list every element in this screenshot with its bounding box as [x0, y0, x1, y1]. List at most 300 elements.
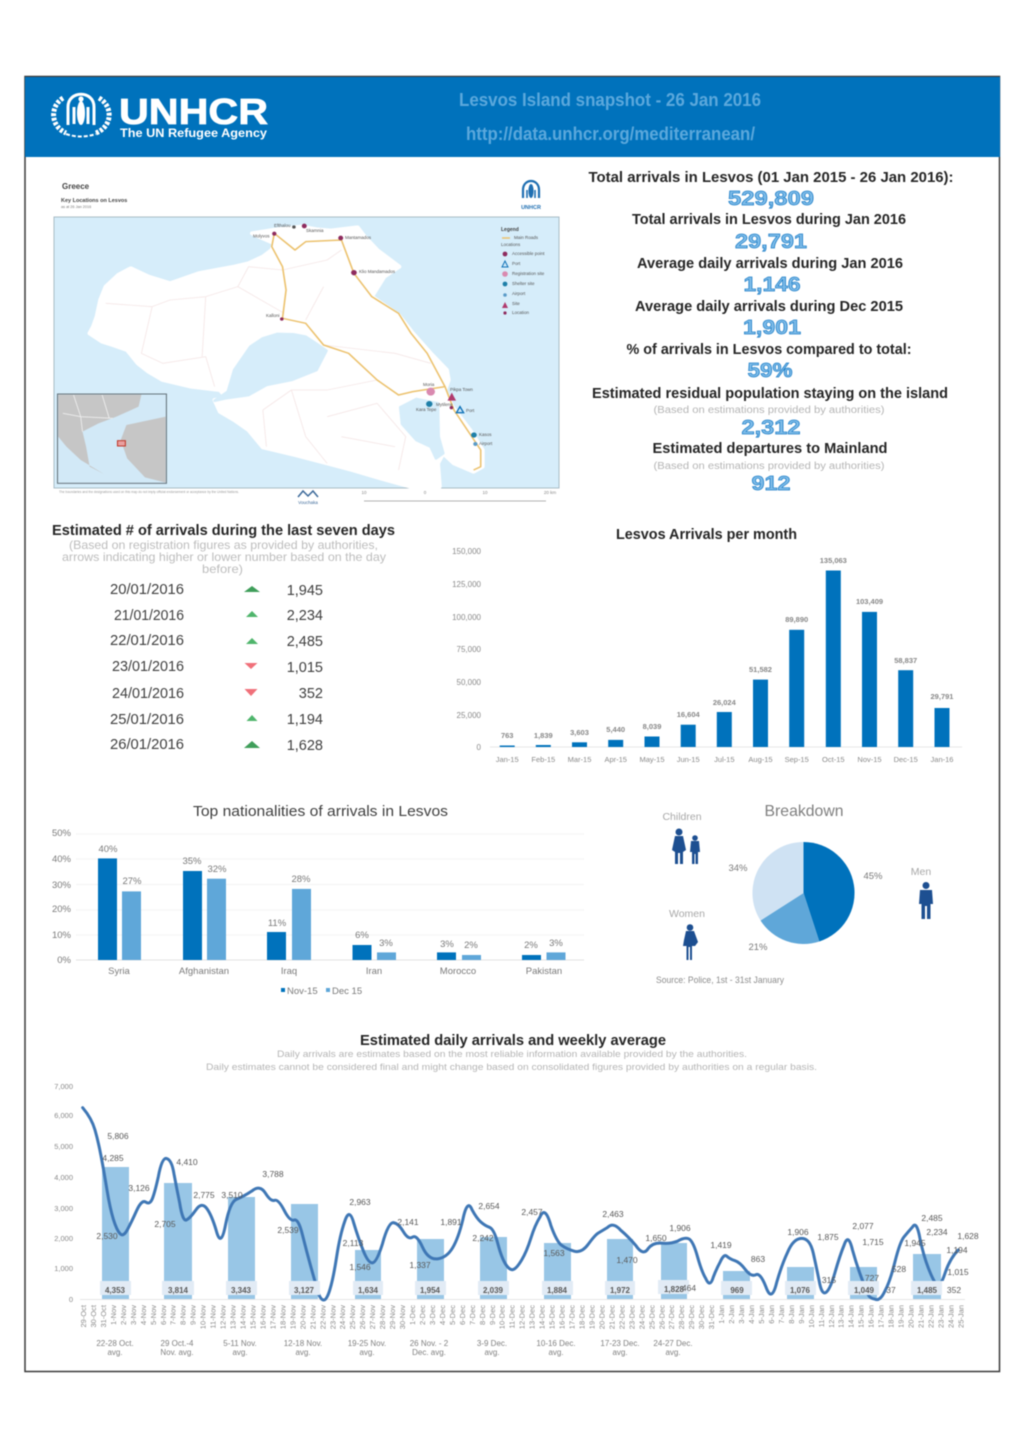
bar value labels: 27%	[122, 876, 142, 887]
date axis labels: 20-Nov	[298, 1305, 307, 1329]
panel: top nationalities	[52, 803, 584, 997]
logo wordmark: UNHCR	[119, 91, 268, 132]
weekly period labels	[96, 1339, 693, 1357]
map frame and sea	[54, 217, 559, 488]
island landmass	[57, 224, 482, 487]
daily value labels: 1,715	[862, 1237, 884, 1247]
icon: UNHCR emblem	[54, 94, 109, 136]
place labels: Port	[466, 408, 475, 413]
chart title: Estimated daily arrivals and weekly average	[360, 1033, 666, 1049]
bar value labels: 3%	[440, 939, 454, 950]
weekly average value labels: 1,972	[610, 1286, 631, 1295]
logo tagline: The UN Refugee Agency	[120, 126, 267, 140]
y axis	[452, 547, 482, 752]
weekly average value labels: 1,634	[358, 1286, 379, 1295]
date axis labels: 31-Oct	[99, 1304, 108, 1328]
y axis: 3,000	[54, 1204, 73, 1213]
weekly period labels: avg.	[359, 1348, 375, 1357]
pie labels	[728, 863, 883, 953]
pie labels: 45%	[863, 871, 883, 882]
map legend: Locations	[501, 242, 521, 247]
location markers	[272, 224, 477, 446]
date axis labels: 5-Nov	[149, 1305, 158, 1325]
chart title: Top nationalities of arrivals in Lesvos	[193, 803, 448, 820]
panel: arrivals during last seven days	[52, 523, 395, 754]
row: 20 January: 20/01/2016	[110, 582, 184, 598]
weekly average value labels: 1,076	[790, 1286, 811, 1295]
map disclaimer and scale bar: Vouchaka	[298, 500, 318, 505]
date axis labels: 10-Jan	[807, 1305, 816, 1328]
row: 20 January: 1,945	[287, 583, 323, 599]
date axis labels: 5-Jan	[757, 1305, 766, 1324]
month labels: Jan-16	[931, 755, 953, 764]
place labels: Mantamados	[345, 235, 372, 240]
daily value labels: 1,546	[349, 1262, 371, 1272]
date axis labels: 13-Jan	[837, 1305, 846, 1328]
daily value labels: 1,194	[946, 1245, 968, 1255]
daily arrivals line	[83, 1108, 958, 1300]
y axis: 5,000	[54, 1142, 73, 1151]
weekly period labels: Dec. avg.	[412, 1348, 446, 1357]
total arrivals in January: 29,791	[735, 231, 807, 253]
bar value labels: 1,839	[534, 731, 553, 740]
bar value labels: 35%	[182, 856, 202, 867]
date axis labels: 27-Nov	[368, 1305, 377, 1329]
weekly period labels: avg.	[232, 1348, 248, 1357]
row: 21 January: 2,234	[287, 608, 323, 624]
month labels: Sep-15	[785, 755, 809, 764]
panel: Lesvos arrivals per month	[452, 527, 962, 764]
date axis labels: 31-Dec	[707, 1305, 716, 1329]
bar value labels: 2%	[464, 940, 478, 951]
date axis labels: 16-Nov	[258, 1305, 268, 1329]
map disclaimer and scale bar: The boundaries and the designations used on this map do not imply official endorsement or acceptance by the United Nations.	[59, 490, 239, 494]
date axis labels: 25-Nov	[348, 1305, 357, 1329]
date axis labels: 8-Nov	[179, 1305, 188, 1325]
date axis labels: 11-Jan	[817, 1305, 826, 1327]
row: 21 January	[114, 608, 323, 624]
daily value labels: 1,945	[904, 1238, 926, 1248]
date axis labels: 26-Dec	[657, 1305, 666, 1329]
y axis labels: 0%	[57, 955, 72, 966]
bar value labels: 89,890	[785, 615, 808, 624]
map disclaimer and scale bar	[59, 490, 556, 505]
weekly period labels: 22-28 Oct.	[96, 1339, 134, 1348]
month labels: Nov-15	[857, 755, 882, 764]
panel: map of key locations on Lesvos	[54, 181, 559, 505]
total arrivals: Total arrivals in Lesvos (01 Jan 2015 - 26 Jan 2016):	[588, 170, 954, 186]
date axis labels: 23-Nov	[328, 1305, 337, 1329]
date axis labels: 15-Jan	[857, 1305, 866, 1328]
row: 23 January: 23/01/2016	[112, 659, 184, 675]
daily value labels: 1,891	[440, 1217, 462, 1227]
place labels: Kalloni	[266, 313, 280, 318]
row: 25 January	[110, 712, 323, 728]
date axis labels: 17-Dec	[568, 1305, 576, 1329]
panel: estimated daily arrivals and weekly average	[54, 1033, 979, 1357]
y axis labels: 30%	[52, 880, 72, 891]
date axis labels: 22-Jan	[926, 1305, 936, 1328]
bar value labels: 58,837	[894, 656, 917, 665]
icon: children: Children	[662, 811, 702, 823]
map legend: Legend	[501, 227, 519, 233]
date axis labels: 8-Jan	[787, 1305, 796, 1324]
average daily January	[637, 256, 903, 296]
date axis labels: 7-Nov	[169, 1305, 178, 1325]
place labels	[253, 223, 493, 446]
map legend: Main Roads	[514, 235, 539, 240]
date axis labels: 16-Jan	[867, 1305, 876, 1328]
chart note: Daily arrivals are estimates based on the most reliable information available provided by the authorities.	[277, 1049, 747, 1060]
daily value labels: 2,539	[277, 1225, 299, 1235]
row: 23 January	[112, 659, 323, 676]
map legend: Airport	[512, 291, 526, 296]
bar value labels: 28%	[291, 874, 311, 885]
place labels: Efthalou	[274, 223, 291, 228]
place labels: Moria	[423, 382, 435, 387]
bar value labels: 3%	[379, 938, 393, 949]
date axis labels: 12-Jan	[827, 1305, 836, 1328]
weekly period labels: 5-11 Nov.	[223, 1339, 257, 1348]
chart legend: Nov-15	[287, 986, 318, 997]
bar value labels: 40%	[98, 844, 118, 855]
bar value labels: 26,024	[713, 698, 737, 707]
date axis labels: 27-Dec	[667, 1305, 676, 1329]
date axis labels: 13-Dec	[528, 1305, 537, 1329]
row: 25 January: 25/01/2016	[110, 712, 184, 728]
date axis labels	[79, 1304, 965, 1329]
date axis labels: 6-Nov	[159, 1305, 168, 1325]
y axis: 50,000	[457, 678, 482, 687]
place labels: Airport	[479, 441, 493, 446]
month labels: Oct-15	[822, 755, 845, 764]
date axis labels: 19-Dec	[588, 1305, 596, 1329]
map legend: Site	[512, 301, 520, 306]
bar value labels: 8,039	[643, 722, 661, 731]
chart title: Lesvos Arrivals per month	[616, 527, 797, 543]
y axis: 100,000	[452, 613, 482, 622]
date axis labels: 19-Jan	[896, 1305, 906, 1328]
average daily January: Average daily arrivals during Jan 2016	[637, 256, 903, 272]
weekly period labels: avg.	[107, 1348, 123, 1357]
average daily December: 1,901	[743, 317, 801, 339]
row: 24 January: 24/01/2016	[112, 686, 184, 702]
weekly period labels: 26 Nov. - 2	[410, 1339, 449, 1348]
weekly average value labels: 2,039	[483, 1286, 504, 1295]
date axis labels: 12-Nov	[219, 1305, 228, 1329]
date axis labels: 24-Jan	[946, 1305, 955, 1328]
y axis: 7,000	[54, 1082, 73, 1091]
date axis labels: 2-Nov	[119, 1305, 128, 1325]
table note: arrows indicating higher or lower number based on the day	[62, 550, 386, 564]
daily value labels: 4,410	[176, 1157, 198, 1167]
departures to mainland	[652, 441, 888, 495]
daily value labels: 1,470	[616, 1255, 638, 1265]
date axis labels: 29-Nov	[388, 1305, 397, 1329]
total arrivals	[588, 170, 954, 210]
row: 26 January	[110, 737, 323, 754]
row: 24 January: 352	[299, 686, 323, 702]
row: 20 January	[110, 582, 323, 599]
daily value labels: 3,126	[128, 1183, 150, 1193]
total arrivals: 529,809	[728, 188, 814, 210]
month labels: Jan-15	[496, 755, 519, 764]
map heading: Key Locations on Lesvos	[61, 198, 127, 204]
pie labels: 21%	[748, 942, 768, 953]
row: 24 January	[112, 686, 323, 702]
date axis labels: 21-Dec	[607, 1305, 616, 1329]
daily value labels	[96, 1131, 979, 1295]
country labels: Afghanistan	[179, 966, 229, 977]
table note: (Based on registration figures as provided by authorities,	[69, 538, 378, 552]
date axis labels: 9-Jan	[797, 1305, 806, 1324]
date axis labels: 2-Jan	[727, 1305, 736, 1324]
icon: women	[669, 908, 705, 960]
residual population: 2,312	[742, 417, 800, 439]
daily value labels: 2,234	[926, 1227, 948, 1237]
month labels: Jul-15	[714, 755, 735, 764]
daily value labels: 3,788	[262, 1169, 284, 1179]
date axis labels: 18-Dec	[578, 1305, 586, 1329]
place labels: Mytilene	[436, 402, 453, 407]
country labels: Iran	[366, 966, 382, 977]
month labels: Feb-15	[531, 755, 555, 764]
date axis labels: 24-Dec	[637, 1305, 646, 1329]
data portal link: http://data.unhcr.org/mediterranean/	[466, 124, 755, 144]
country labels: Syria	[108, 966, 131, 977]
y axis: 6,000	[54, 1111, 73, 1120]
bar value labels: 3%	[549, 938, 563, 949]
source note: Source: Police, 1st - 31st January	[656, 975, 784, 985]
month labels	[496, 755, 953, 764]
report title: Lesvos Island snapshot - 26 Jan 2016	[459, 90, 761, 110]
date axis labels: 7-Dec	[468, 1305, 477, 1325]
chart note: Daily estimates cannot be considered final and might change based on consolidated figures provided by authorities on a regular basis.	[206, 1062, 817, 1073]
date axis labels: 1-Jan	[717, 1305, 726, 1324]
bar value labels	[501, 556, 953, 740]
month labels: Jun-15	[677, 755, 700, 764]
bar chart: monthly arrivals	[500, 570, 950, 747]
daily value labels: 2,457	[521, 1207, 543, 1217]
weekly average value labels: 1,828	[664, 1285, 685, 1294]
date axis labels: 29-Dec	[687, 1305, 696, 1329]
date axis labels: 3-Jan	[737, 1305, 746, 1324]
country labels: Pakistan	[526, 966, 562, 977]
date axis labels: 7-Jan	[777, 1305, 786, 1324]
weekly period labels: 24-27 Dec.	[653, 1339, 693, 1348]
residual population: (Based on estimations provided by authorities)	[654, 405, 884, 416]
daily value labels: 4,285	[102, 1153, 124, 1163]
bar value labels: 16,604	[677, 710, 700, 719]
daily value labels: 1,337	[409, 1260, 431, 1270]
bar value labels: 6%	[355, 930, 369, 941]
date axis labels: 8-Dec	[478, 1305, 487, 1325]
icon: children	[662, 811, 702, 864]
row: 22 January	[110, 633, 323, 650]
bar value labels: 763	[501, 731, 513, 740]
bar value labels: 2%	[524, 940, 538, 951]
map legend: Registration site	[512, 271, 545, 276]
row: 22 January: 22/01/2016	[110, 633, 184, 649]
bar chart: Nov-15	[98, 858, 541, 960]
map disclaimer and scale bar: 10	[361, 490, 367, 495]
date axis labels: 10-Nov	[199, 1305, 208, 1329]
place labels: Kasos	[479, 432, 492, 437]
date axis labels: 9-Nov	[189, 1305, 198, 1325]
date axis labels: 9-Dec	[488, 1305, 497, 1325]
daily value labels: 464	[682, 1283, 696, 1293]
y axis: 1,000	[54, 1264, 73, 1273]
weekly average value labels: 1,954	[420, 1286, 441, 1295]
date axis labels: 30-Nov	[398, 1305, 407, 1329]
weekly period labels: 10-16 Dec.	[536, 1339, 576, 1348]
date axis labels: 10-Dec	[498, 1305, 507, 1329]
daily value labels: 2,963	[349, 1197, 371, 1207]
date axis labels: 19-Nov	[288, 1305, 297, 1329]
average daily December: Average daily arrivals during Dec 2015	[635, 299, 903, 315]
daily value labels: 2,485	[921, 1213, 943, 1223]
daily value labels: 1,419	[710, 1240, 732, 1250]
date axis labels: 25-Dec	[647, 1305, 656, 1329]
date axis labels: 21-Jan	[916, 1305, 926, 1328]
date axis labels: 26-Nov	[358, 1305, 367, 1329]
departures to mainland: Estimated departures to Mainland	[652, 441, 888, 457]
map heading	[61, 182, 127, 209]
date axis labels: 4-Dec	[438, 1305, 447, 1325]
date axis labels: 16-Dec	[558, 1305, 567, 1329]
share of arrivals: 59%	[748, 360, 793, 382]
y axis: 150,000	[452, 547, 482, 556]
date axis labels: 12-Dec	[518, 1305, 527, 1329]
bar value labels	[98, 844, 563, 951]
average daily January: 1,146	[744, 274, 800, 296]
map disclaimer and scale bar: 10	[482, 490, 488, 495]
country labels: Iraq	[281, 966, 297, 977]
weekly period labels: avg.	[295, 1348, 311, 1357]
y axis: 125,000	[452, 580, 482, 589]
y axis: 2,000	[54, 1234, 73, 1243]
daily value labels: 5,806	[107, 1131, 129, 1141]
month labels: Aug-15	[748, 755, 773, 764]
row: 25 January: 1,194	[287, 712, 323, 728]
weekly period labels: 19-25 Nov.	[348, 1339, 386, 1348]
weekly period labels: 17-23 Dec.	[600, 1339, 640, 1348]
date axis labels: 4-Jan	[747, 1305, 756, 1324]
weekly average value labels: 1,049	[854, 1286, 875, 1295]
row: 22 January: 2,485	[287, 634, 323, 650]
date axis labels: 18-Jan	[887, 1305, 896, 1328]
date axis labels: 29-Oct	[79, 1304, 88, 1328]
date axis labels: 20-Jan	[906, 1305, 916, 1328]
daily value labels: 2,242	[472, 1233, 494, 1243]
month labels: May-15	[639, 755, 665, 764]
date axis labels: 1-Nov	[109, 1305, 118, 1325]
Gulf of Gera	[400, 399, 443, 458]
daily value labels: 1,628	[957, 1231, 979, 1241]
y axis: 0	[69, 1295, 73, 1304]
y axis labels	[52, 828, 72, 966]
date axis labels: 5-Dec	[448, 1305, 457, 1325]
weekly period labels: 3-9 Dec.	[477, 1339, 507, 1348]
bar chart: Dec-15	[122, 879, 566, 960]
icon: women: Women	[669, 908, 705, 920]
map legend	[501, 227, 545, 315]
daily value labels: 2,077	[852, 1221, 874, 1231]
departures to mainland: (Based on estimations provided by authorities)	[654, 461, 884, 472]
date axis labels: 17-Nov	[268, 1305, 277, 1329]
weekly period labels: 12-18 Nov.	[284, 1339, 322, 1348]
bar value labels: 32%	[207, 864, 227, 875]
row: 23 January: 1,015	[287, 660, 323, 676]
row: 26 January: 26/01/2016	[110, 737, 184, 753]
date axis labels: 4-Nov	[139, 1305, 148, 1325]
weekly average value labels: 3,343	[231, 1286, 252, 1295]
total arrivals in January	[632, 212, 906, 253]
panel: key statistics	[588, 170, 954, 495]
y axis: 75,000	[457, 645, 482, 654]
residual population	[592, 386, 948, 439]
date axis labels: 1-Dec	[408, 1305, 417, 1325]
date axis labels: 25-Jan	[956, 1305, 965, 1328]
date axis labels: 11-Dec	[508, 1305, 517, 1329]
y axis labels: 20%	[52, 904, 72, 915]
daily value labels: 1,650	[645, 1233, 667, 1243]
date axis labels: 23-Dec	[627, 1305, 636, 1329]
date axis labels: 11-Nov	[209, 1305, 218, 1329]
map legend: Shelter site	[512, 281, 535, 286]
row: 21 January: 21/01/2016	[114, 608, 184, 624]
bar value labels: 5,440	[606, 725, 625, 734]
y axis: 0	[477, 743, 482, 752]
month labels: Dec-15	[894, 755, 918, 764]
date axis labels: 30-Oct	[89, 1304, 98, 1328]
header banner	[25, 77, 1000, 157]
date axis labels: 3-Nov	[129, 1305, 138, 1325]
weekly average value labels: 1,485	[917, 1286, 938, 1295]
y axis labels: 50%	[52, 828, 72, 839]
weekly average value labels: 969	[730, 1286, 744, 1295]
date axis labels: 21-Nov	[308, 1305, 317, 1329]
minor roads	[106, 250, 431, 470]
row: 26 January: 1,628	[287, 738, 323, 754]
daily value labels: 1,015	[947, 1267, 969, 1277]
date axis labels: 28-Dec	[677, 1305, 686, 1329]
weekly average value labels: 4,353	[105, 1286, 126, 1295]
weekly average bars	[102, 1167, 941, 1299]
weekly period labels: 29 Oct.-4	[161, 1339, 194, 1348]
pie labels: 34%	[728, 863, 748, 874]
daily value labels: 315	[822, 1275, 836, 1285]
map legend: Location	[512, 310, 530, 315]
daily value labels: 2,463	[602, 1209, 624, 1219]
date axis labels: 22-Nov	[318, 1305, 327, 1329]
daily value labels: 1,563	[543, 1248, 565, 1258]
map legend: Accessible point	[512, 251, 545, 256]
bar value labels: 11%	[268, 918, 287, 929]
icon: men	[911, 866, 933, 919]
place labels: Molyvos	[253, 234, 270, 238]
y axis: 4,000	[54, 1173, 73, 1182]
date axis labels: 20-Dec	[597, 1305, 606, 1329]
map heading: as at 26 Jan 2016	[61, 205, 91, 209]
bar value labels: 135,063	[820, 556, 847, 565]
chart legend: Dec 15	[332, 986, 362, 997]
daily value labels: 2,141	[397, 1217, 419, 1227]
place labels: Pikpa Town	[450, 387, 473, 392]
daily value labels: 352	[947, 1285, 961, 1295]
y axis labels: 10%	[52, 930, 72, 941]
daily value labels: 528	[892, 1264, 906, 1274]
